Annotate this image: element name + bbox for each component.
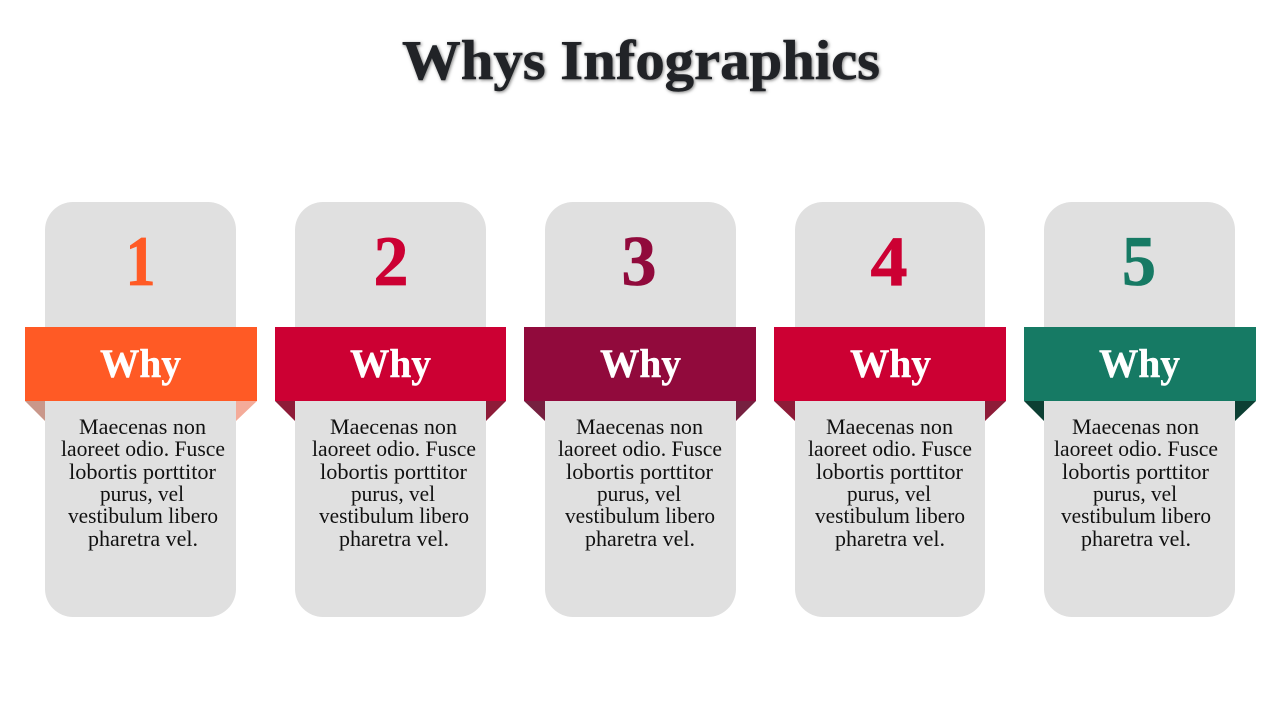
body text 4: pharetra vel. <box>835 526 945 551</box>
body text 5 <box>1054 414 1218 551</box>
body text 4 <box>808 414 972 551</box>
number 5: 5 <box>1122 223 1156 301</box>
body text 5: lobortis porttitor <box>1062 459 1210 484</box>
ribbon fold left 3 <box>524 401 545 421</box>
title: Whys Infographics <box>402 30 880 92</box>
body text 1: vestibulum libero <box>68 503 218 528</box>
body text 1: pharetra vel. <box>88 526 198 551</box>
card background 5 <box>1044 202 1235 617</box>
number 3: 3 <box>622 223 656 301</box>
panel: why 5 <box>1024 202 1256 617</box>
body text 4: purus, vel <box>847 481 931 506</box>
body text 3: purus, vel <box>597 481 681 506</box>
panel: why 3 <box>524 202 756 617</box>
body text 5: laoreet odio. Fusce <box>1054 436 1218 461</box>
ribbon banner 3 <box>524 327 756 401</box>
ribbon fold right 5 <box>1235 401 1256 421</box>
body text 5: purus, vel <box>1093 481 1177 506</box>
panel: why 1 <box>25 202 257 617</box>
body text 1: Maecenas non <box>79 414 206 439</box>
body text 4: laoreet odio. Fusce <box>808 436 972 461</box>
body text 1: laoreet odio. Fusce <box>61 436 225 461</box>
card background 3 <box>545 202 736 617</box>
body text 2: pharetra vel. <box>339 526 449 551</box>
ribbon fold left 1 <box>25 401 45 421</box>
ribbon fold right 1 <box>236 401 257 421</box>
body text 2 <box>312 414 476 551</box>
card background 4 <box>795 202 985 617</box>
card background 2 <box>295 202 486 617</box>
body text 3: laoreet odio. Fusce <box>558 436 722 461</box>
body text 2: purus, vel <box>351 481 435 506</box>
ribbon banner 5 <box>1024 327 1256 401</box>
body text 4: Maecenas non <box>826 414 953 439</box>
body text 1 <box>61 414 225 551</box>
body text 4: lobortis porttitor <box>816 459 964 484</box>
number 1: 1 <box>126 223 156 301</box>
ribbon banner 1 <box>25 327 257 401</box>
body text 2: lobortis porttitor <box>320 459 468 484</box>
body text 5: vestibulum libero <box>1061 503 1211 528</box>
ribbon fold left 2 <box>275 401 295 421</box>
card background 1 <box>45 202 236 617</box>
ribbon label 1: Why <box>100 341 181 386</box>
body text 5: Maecenas non <box>1072 414 1199 439</box>
ribbon fold right 4 <box>985 401 1006 421</box>
ribbon fold right 2 <box>486 401 506 421</box>
body text 3: pharetra vel. <box>585 526 695 551</box>
body text 2: vestibulum libero <box>319 503 469 528</box>
ribbon label 2: Why <box>350 341 431 386</box>
ribbon label 3: Why <box>600 341 681 386</box>
ribbon fold left 5 <box>1024 401 1044 421</box>
body text 3: lobortis porttitor <box>566 459 714 484</box>
ribbon fold right 3 <box>736 401 756 421</box>
ribbon banner 4 <box>774 327 1006 401</box>
body text 2: laoreet odio. Fusce <box>312 436 476 461</box>
ribbon label 5: Why <box>1099 341 1180 386</box>
number 2: 2 <box>374 223 408 301</box>
panel: why 4 <box>774 202 1006 617</box>
ribbon banner 2 <box>275 327 506 401</box>
body text 4: vestibulum libero <box>815 503 965 528</box>
ribbon fold left 4 <box>774 401 795 421</box>
ribbon label 4: Why <box>850 341 931 386</box>
panel: why 2 <box>275 202 506 617</box>
body text 3: vestibulum libero <box>565 503 715 528</box>
body text 1: purus, vel <box>100 481 184 506</box>
body text 5: pharetra vel. <box>1081 526 1191 551</box>
body text 3: Maecenas non <box>576 414 703 439</box>
number 4: 4 <box>870 223 908 301</box>
body text 2: Maecenas non <box>330 414 457 439</box>
body text 3 <box>558 414 722 551</box>
body text 1: lobortis porttitor <box>69 459 217 484</box>
